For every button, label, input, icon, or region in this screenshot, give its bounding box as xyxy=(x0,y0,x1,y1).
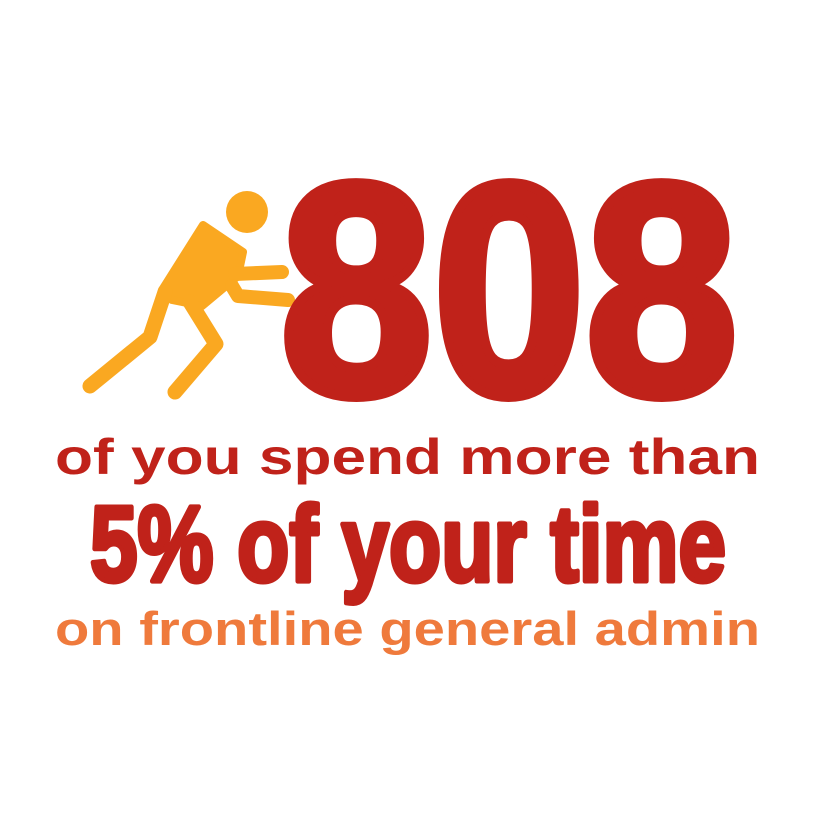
icon: person pushing xyxy=(90,191,288,392)
text line 1: of you spend more than xyxy=(55,429,760,485)
big number 808: 808 xyxy=(280,121,738,458)
text line 3: on frontline general admin xyxy=(55,602,760,655)
